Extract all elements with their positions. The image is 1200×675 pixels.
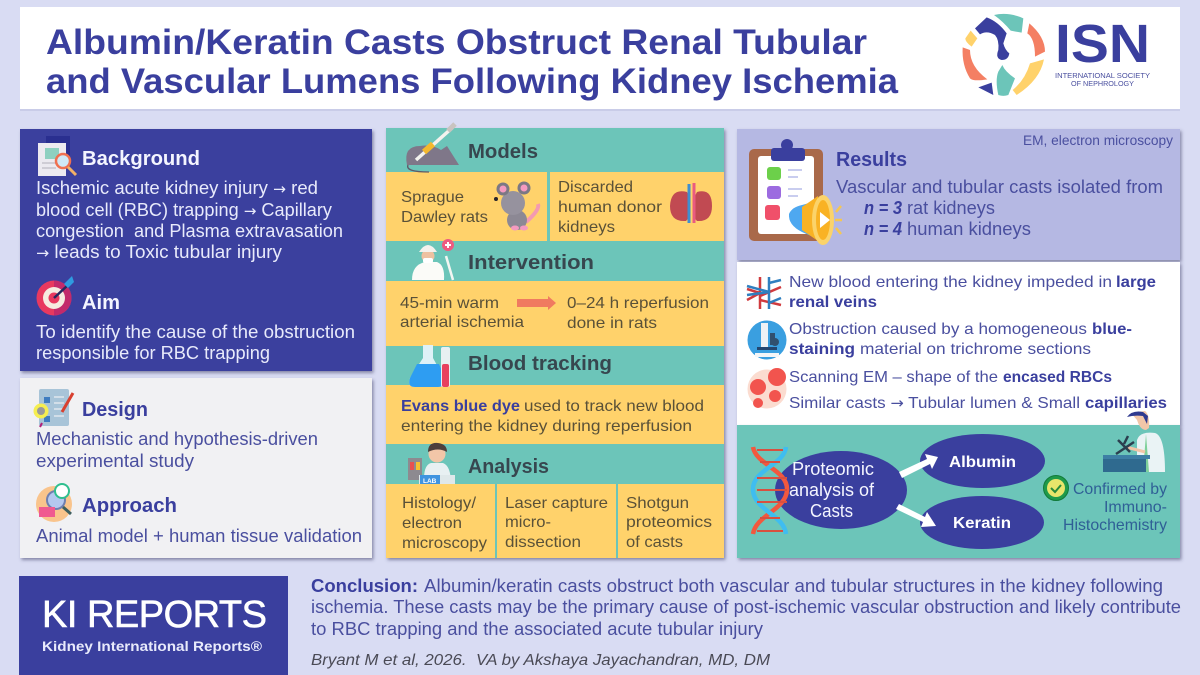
finding: blue-staining material bbox=[789, 321, 1132, 358]
arrow: to keratin bbox=[896, 504, 936, 527]
heading: Approach: Approach bbox=[82, 495, 177, 517]
panel: results bbox=[737, 129, 1180, 260]
results text: n = 3 bbox=[864, 198, 902, 218]
panel: design and approach bbox=[20, 378, 372, 558]
ellipse: keratin bbox=[920, 496, 1044, 549]
background text: Ischemic acute kidney injury → red bbox=[36, 178, 318, 198]
arrow: ischemia to reperfusion bbox=[517, 296, 556, 310]
blood tracking text: Evans blue dye bbox=[401, 398, 520, 415]
ellipse: albumin bbox=[920, 434, 1045, 488]
icon: target bbox=[36, 276, 74, 316]
heading: Intervention: Intervention bbox=[468, 252, 594, 274]
confirmed by immunohistochemistry: Confirmed by bbox=[1073, 481, 1167, 498]
background text: congestion and Plasma extravasation bbox=[36, 221, 343, 241]
intervention: ischemia: arterial ischemia bbox=[400, 314, 524, 331]
confirmed by immunohistochemistry: Immuno- bbox=[1104, 499, 1167, 516]
icon: study design document bbox=[34, 389, 73, 427]
arrow: to albumin bbox=[899, 454, 938, 478]
design text: experimental study bbox=[36, 451, 194, 471]
icon: approach magnifier bbox=[36, 484, 72, 522]
blood tracking text: entering the kidney during reperfusion bbox=[401, 418, 692, 435]
models: human kidneys bbox=[558, 179, 712, 236]
icon: kidneys bbox=[670, 183, 712, 223]
finding: similar casts: Similar casts → Tubular lumen & Small bbox=[789, 394, 1080, 412]
analysis: laser capture: dissection bbox=[505, 534, 581, 551]
panel: proteomic analysis bbox=[737, 411, 1180, 558]
label: proteomic analysis of casts: analysis of bbox=[789, 480, 875, 500]
heading: Background: Background bbox=[82, 148, 200, 170]
KI Reports logo: Kidney International Reports® bbox=[42, 638, 263, 654]
finding: encased RBCs: Scanning EM – shape of the bbox=[789, 369, 998, 386]
models: rats: Dawley rats bbox=[401, 209, 488, 226]
footnote: EM abbreviation: EM, electron microscopy bbox=[1023, 133, 1173, 148]
conclusion bbox=[311, 576, 1181, 639]
confirmed by immunohistochemistry: Histochemistry bbox=[1063, 517, 1167, 534]
ISN logo bbox=[963, 14, 1150, 96]
label: proteomic analysis of casts: Casts bbox=[810, 501, 853, 521]
intervention: reperfusion: done in rats bbox=[567, 315, 657, 332]
finding: large renal veins: New blood entering the kidney impeded in bbox=[789, 274, 1112, 291]
analysis: laser capture: micro- bbox=[505, 514, 551, 531]
icon: DNA helix bbox=[753, 447, 787, 534]
icon: confirmed check badge bbox=[1044, 476, 1068, 500]
aim text: responsible for RBC trapping bbox=[36, 343, 270, 363]
finding: similar casts: capillaries bbox=[1085, 395, 1167, 412]
heading: Blood tracking: Blood tracking bbox=[468, 353, 612, 375]
ISN logo: OF NEPHROLOGY bbox=[1071, 79, 1134, 88]
conclusion: Albumin/keratin casts obstruct both vascular and tubular structures in the kidney following bbox=[424, 576, 1163, 596]
finding: blue-staining material: staining bbox=[789, 341, 855, 358]
design text bbox=[36, 429, 318, 471]
conclusion: Conclusion: bbox=[311, 576, 418, 596]
models: human kidneys: Discarded bbox=[558, 179, 633, 196]
finding: blue-staining material: material on trichrome sections bbox=[860, 341, 1091, 358]
analysis: histology bbox=[402, 495, 487, 552]
ellipse: albumin: Albumin bbox=[949, 454, 1016, 471]
ISN logo: ISN bbox=[1055, 14, 1150, 74]
background text: → leads to Toxic tubular injury bbox=[36, 242, 282, 262]
results text: Vascular and tubular casts isolated from bbox=[836, 177, 1163, 197]
header band bbox=[20, 7, 1180, 111]
models: rats bbox=[401, 182, 538, 230]
analysis: histology: electron bbox=[402, 515, 462, 532]
aim text: To identify the cause of the obstruction bbox=[36, 322, 355, 342]
title: and Vascular Lumens Following Kidney Ischemia bbox=[46, 62, 899, 101]
finding: encased RBCs: encased RBCs bbox=[1003, 369, 1112, 386]
results text: n = 4 bbox=[864, 219, 902, 239]
icon: flask and test tube bbox=[409, 345, 450, 387]
conclusion: to RBC trapping and the associated acute tubular injury bbox=[311, 619, 763, 639]
intervention: reperfusion bbox=[567, 295, 709, 332]
analysis: histology: Histology/ bbox=[402, 495, 477, 512]
icon: red blood cells bbox=[748, 368, 786, 408]
analysis: laser capture bbox=[505, 495, 608, 551]
icon: scientist at microscope bbox=[1103, 411, 1165, 472]
citation: Bryant M et al, 2026. VA by Akshaya Jayachandran, MD, DM bbox=[311, 652, 771, 669]
background text: blood cell (RBC) trapping → Capillary bbox=[36, 200, 332, 220]
analysis: shotgun proteomics: Shotgun bbox=[626, 495, 689, 512]
label: proteomic analysis of casts bbox=[789, 459, 875, 521]
title bbox=[46, 23, 899, 101]
models: human kidneys: kidneys bbox=[558, 219, 615, 236]
finding: large renal veins: large bbox=[1116, 274, 1156, 291]
models: rats: Sprague bbox=[401, 189, 464, 206]
heading: Analysis: Analysis bbox=[468, 456, 549, 478]
panel: background and aim bbox=[20, 129, 372, 371]
blood tracking text: used to track new blood bbox=[524, 398, 704, 415]
models: human kidneys: human donor bbox=[558, 199, 663, 216]
icon: clipboard with megaphone bbox=[749, 139, 842, 245]
analysis: laser capture: Laser capture bbox=[505, 495, 608, 512]
icon: lab scientist bbox=[408, 443, 455, 485]
heading: Models: Models bbox=[468, 141, 538, 163]
panel: key findings bbox=[737, 262, 1180, 425]
ellipse: keratin: Keratin bbox=[953, 515, 1011, 532]
design text: Mechanistic and hypothesis-driven bbox=[36, 429, 318, 449]
finding: large renal veins: renal veins bbox=[789, 294, 877, 311]
icon: microscope bbox=[748, 320, 786, 360]
ISN logo: INTERNATIONAL SOCIETY bbox=[1055, 71, 1150, 80]
label: proteomic analysis of casts: Proteomic bbox=[792, 459, 874, 479]
finding: blue-staining material: blue- bbox=[1092, 321, 1132, 338]
analysis: shotgun proteomics: proteomics bbox=[626, 514, 712, 531]
results text: human kidneys bbox=[907, 219, 1031, 239]
results text bbox=[836, 177, 1163, 239]
icon: mouse with syringe bbox=[406, 124, 459, 172]
approach text: Animal model + human tissue validation bbox=[36, 526, 362, 546]
analysis: shotgun proteomics: of casts bbox=[626, 534, 683, 551]
intervention: ischemia bbox=[400, 295, 524, 331]
finding: large renal veins bbox=[789, 274, 1156, 311]
finding: encased RBCs bbox=[789, 369, 1112, 386]
icon: surgeon bbox=[412, 239, 454, 280]
icon: lab scientist: LAB bbox=[423, 478, 437, 485]
intervention: reperfusion: 0–24 h reperfusion bbox=[567, 295, 709, 312]
confirmed by immunohistochemistry bbox=[1063, 481, 1167, 534]
panel: methods bbox=[386, 124, 724, 558]
background text bbox=[36, 178, 343, 262]
analysis: shotgun proteomics bbox=[626, 495, 712, 551]
blood tracking text bbox=[401, 398, 704, 435]
title: Albumin/Keratin Casts Obstruct Renal Tubular bbox=[46, 23, 867, 62]
aim text bbox=[36, 322, 355, 363]
icon: document with magnifier bbox=[38, 136, 76, 176]
finding: blue-staining material: Obstruction caused by a homogeneous bbox=[789, 321, 1087, 338]
intervention: ischemia: 45-min warm bbox=[400, 295, 499, 312]
icon: rat bbox=[494, 182, 538, 230]
results text: rat kidneys bbox=[907, 198, 995, 218]
heading: Aim: Aim bbox=[82, 292, 120, 314]
ellipse: proteomic analysis of casts bbox=[775, 451, 907, 529]
analysis: histology: microscopy bbox=[402, 535, 487, 552]
conclusion: ischemia. These casts may be the primary cause of post-ischemic vascular obstruction and likely contribute bbox=[311, 597, 1181, 617]
KI Reports logo: KI REPORTS bbox=[42, 594, 267, 636]
icon: renal vessels bbox=[747, 277, 781, 309]
heading: Results: Results bbox=[836, 149, 907, 171]
heading: Design: Design bbox=[82, 399, 148, 421]
KI Reports logo bbox=[19, 576, 288, 675]
